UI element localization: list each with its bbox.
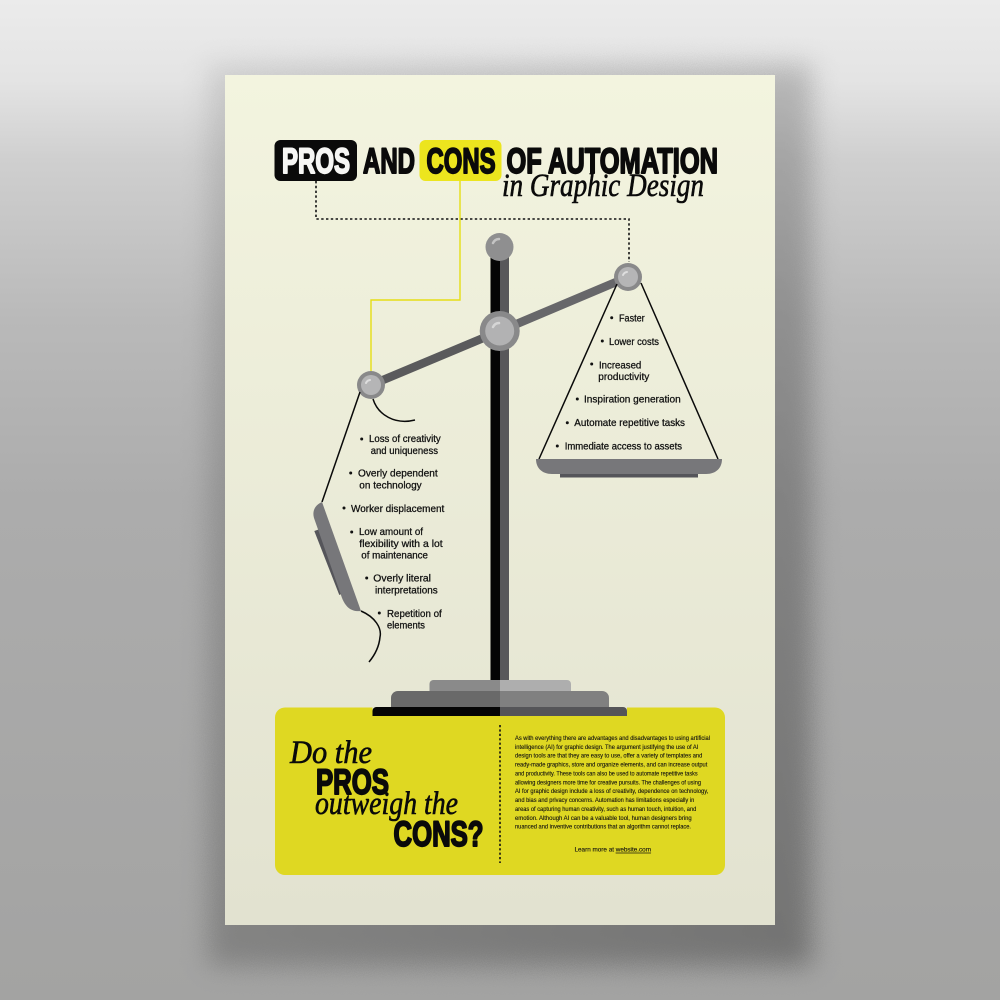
cons list xyxy=(342,434,444,631)
panel: conclusion xyxy=(275,708,725,875)
cons: low flexibility xyxy=(350,527,443,562)
scale: beam xyxy=(371,277,628,385)
connector: cons yellow line xyxy=(371,181,460,372)
scale: left pan xyxy=(313,502,361,611)
body paragraph: allowing designers more time for creative pursuits. The challenges of using xyxy=(515,779,701,786)
body paragraph: AI for graphic design include a loss of creativity, dependence on technology, xyxy=(515,788,709,795)
scale: right pan xyxy=(536,459,722,478)
cons: repetition: Repetition of xyxy=(387,609,442,620)
pros: inspiration generation: Inspiration generation xyxy=(584,395,681,406)
title: pros badge xyxy=(274,140,357,181)
question heading xyxy=(289,735,484,854)
body paragraph: As with everything there are advantages and disadvantages to using artificial xyxy=(515,735,710,742)
poster xyxy=(225,75,775,925)
scale: left string and loose cords xyxy=(322,392,415,662)
body paragraph: and productivity. These tools can also be used to automate repetitive tasks xyxy=(515,770,698,778)
body paragraph: intelligence (AI) for graphic design. The argument justifying the use of AI xyxy=(515,744,699,751)
cons: overly dependent xyxy=(349,469,438,492)
cons: low flexibility: flexibility with a lot xyxy=(359,539,443,550)
scale: right strings xyxy=(539,283,718,459)
pros: increased productivity: Increased xyxy=(599,360,641,371)
title: and: AND xyxy=(363,142,415,181)
panel background xyxy=(275,708,725,875)
cons: repetition xyxy=(378,609,442,631)
learn more link: Learn more at website.com xyxy=(574,847,651,854)
pros: lower costs: Lower costs xyxy=(609,337,659,348)
body paragraph: and bias and privacy concerns. Automation has limitations especially in xyxy=(515,797,695,804)
pros: faster: Faster xyxy=(619,314,645,325)
pros: increased productivity: productivity xyxy=(598,372,650,383)
body paragraph: nuanced and inventive contributions that an algorithm cannot replace. xyxy=(515,824,691,831)
cons: worker displacement: Worker displacement xyxy=(351,504,444,515)
cons: low flexibility: of maintenance xyxy=(361,550,428,562)
subtitle: in Graphic Design xyxy=(502,168,704,204)
scale: pole xyxy=(490,250,509,680)
title: of automation: OF AUTOMATION xyxy=(506,142,718,181)
connector: pros dotted line xyxy=(316,181,629,262)
pros: immediate access: Immediate access to assets xyxy=(565,441,682,452)
scale: left pivot xyxy=(357,371,385,399)
body paragraph: areas of capturing human creativity, such as human touch, intuition, and xyxy=(515,806,697,813)
pros: automate repetitive tasks: Automate repetitive tasks xyxy=(574,418,685,429)
scale xyxy=(313,233,722,716)
title: pros badge: PROS xyxy=(282,142,350,181)
cons: overly literal: Overly literal xyxy=(373,574,431,585)
body paragraph: emotion. Although AI can be a valuable tool, human designers bring xyxy=(515,815,692,822)
cons: overly dependent: Overly dependent xyxy=(358,469,438,480)
body paragraph: design tools are that they are easy to use, offer a variety of templates and xyxy=(515,753,703,760)
cons: overly literal: interpretations xyxy=(375,585,438,596)
cons: loss of creativity: Loss of creativity xyxy=(369,434,441,445)
question heading: PROS xyxy=(316,763,389,802)
body paragraph xyxy=(515,735,710,831)
cons: overly dependent: on technology xyxy=(359,480,422,492)
body paragraph: ready-made graphics, store and organize elements, and can increase output xyxy=(515,762,708,769)
cons: loss of creativity xyxy=(360,434,441,457)
scale: center pivot xyxy=(480,311,520,351)
pros list xyxy=(556,314,685,452)
poster shadow xyxy=(208,64,812,966)
cons: low flexibility: Low amount of xyxy=(359,527,423,538)
question heading: outweigh the xyxy=(315,786,458,822)
title: cons badge: CONS xyxy=(426,142,496,181)
scale: base xyxy=(372,680,627,716)
title: cons badge xyxy=(420,140,502,181)
cons: repetition: elements xyxy=(387,620,425,631)
cons: loss of creativity: and uniqueness xyxy=(371,446,438,457)
cons: overly literal xyxy=(365,574,438,596)
question heading: CONS? xyxy=(394,815,484,854)
pros: increased productivity xyxy=(590,360,650,383)
scale: right pivot xyxy=(614,263,642,291)
question heading: Do the xyxy=(289,735,372,771)
scale: top knob xyxy=(486,233,514,261)
dotted divider xyxy=(499,725,501,863)
title xyxy=(274,140,718,204)
